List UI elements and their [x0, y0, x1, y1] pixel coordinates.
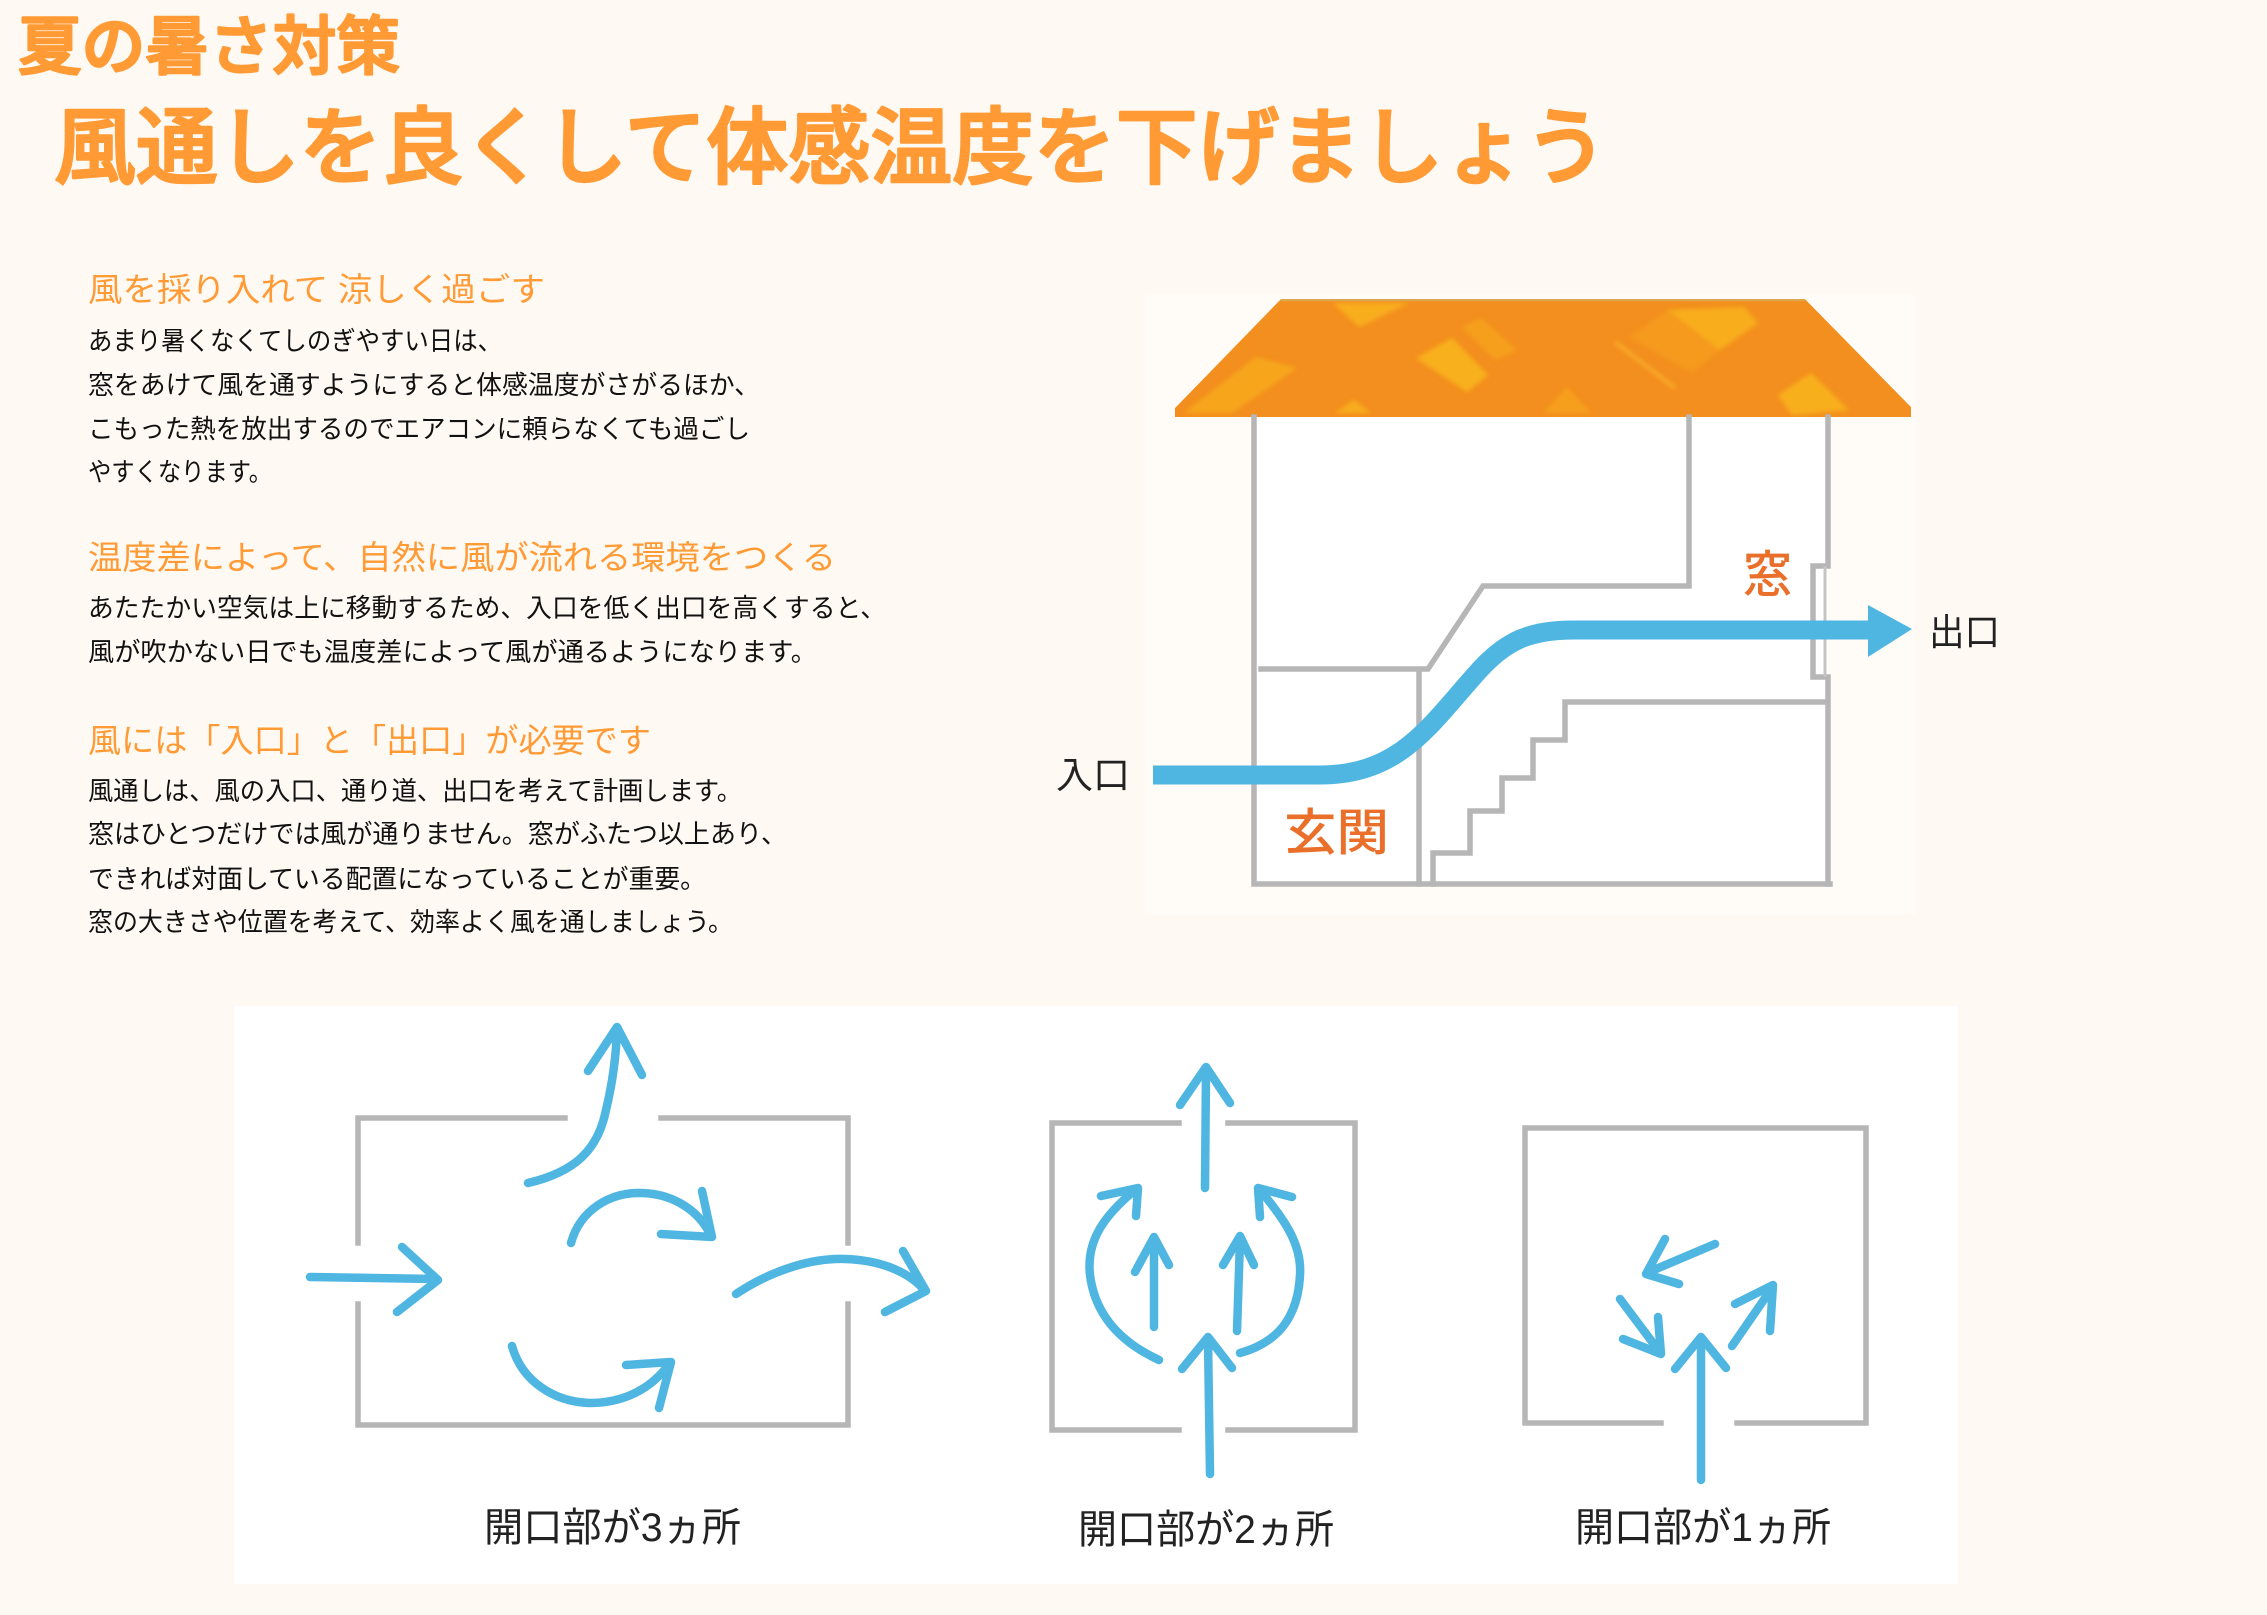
body text lines: 窓をあけて風を通すようにすると体感温度がさがるほか、 [88, 370, 760, 400]
body text lines: こもった熱を放出するのでエアコンに頼らなくても過ごし [88, 414, 750, 444]
heading: 風を採り入れて: 風を採り入れて 涼しく過ごす [88, 271, 545, 308]
label: 開口部が3ヵ所 [484, 1506, 741, 1550]
body text lines: 窓の大きさや位置を考えて、効率よく風を通しましょう。 [88, 907, 733, 937]
heading: 入口と出口: 風には「入口」と「出口」が必要です [88, 722, 651, 759]
arrow: lower swirl [512, 1346, 671, 1408]
room walls [1052, 1123, 1355, 1430]
arrow: upper swirl [571, 1191, 712, 1243]
title: small heading: 夏の暑さ対策 [18, 11, 400, 83]
panel: text block 2 [88, 539, 886, 667]
illustration: house cross-section [1056, 295, 2000, 915]
arrow: exit [1180, 1067, 1230, 1188]
body text lines: できれば対面している配置になっていることが重要。 [88, 864, 706, 894]
arrow: inflow [1182, 1337, 1232, 1474]
title: main heading: 風通しを良くして体感温度を下げましょう [54, 101, 1607, 195]
house walls and stairs [1254, 417, 1830, 884]
room walls [358, 1118, 848, 1425]
arrow: inner left [1135, 1237, 1169, 1327]
panel: text block 1 [88, 271, 760, 487]
body text lines: あまり暑くなくてしのぎやすい日は、 [88, 326, 502, 356]
label: 窓: 窓 [1743, 547, 1792, 603]
body text lines: 風が吹かない日でも温度差によって風が通るようになります。 [88, 637, 817, 667]
body text lines: やすくなります。 [88, 457, 272, 487]
arrow: left loop [1089, 1188, 1159, 1360]
panel background [234, 1006, 1958, 1584]
label: 開口部が2ヵ所 [1078, 1508, 1334, 1552]
label: 玄関: 玄関 [1284, 805, 1389, 861]
airflow arrow [1153, 605, 1912, 775]
diagram: three openings [310, 1027, 926, 1550]
heading: 温度差: 温度差によって、自然に風が流れる環境をつくる [88, 539, 836, 576]
arrow: upper right [1732, 1285, 1773, 1346]
arrow: right exit [736, 1251, 926, 1312]
arrow: inflow [1675, 1337, 1726, 1480]
arrow: right loop [1240, 1188, 1300, 1353]
body text lines [88, 326, 760, 487]
body text lines: 窓はひとつだけでは風が通りません。窓がふたつ以上あり、 [88, 819, 787, 849]
house interior [1254, 417, 1828, 884]
label: 出口: 出口 [1929, 612, 2000, 653]
arrow: inner right [1223, 1236, 1254, 1331]
diagram: one opening [1525, 1128, 1866, 1550]
arrow: lower left [1620, 1299, 1661, 1354]
arrow: up exit [528, 1027, 642, 1183]
arrow: upper left [1646, 1239, 1715, 1284]
panel: text block 3 [88, 722, 787, 937]
roof [1175, 299, 1911, 417]
body text lines [88, 593, 886, 667]
label: 入口: 入口 [1056, 755, 1130, 796]
room walls [1525, 1128, 1866, 1423]
label: 開口部が1ヵ所 [1575, 1506, 1831, 1550]
diagram: two openings [1052, 1067, 1355, 1552]
panel: opening diagrams [234, 1006, 1958, 1584]
house backing [1145, 295, 1915, 915]
body text lines [88, 776, 787, 937]
body text lines: 風通しは、風の入口、通り道、出口を考えて計画します。 [88, 776, 742, 806]
body text lines: あたたかい空気は上に移動するため、入口を低く出口を高くすると、 [88, 593, 886, 623]
arrow: inflow [310, 1247, 438, 1312]
